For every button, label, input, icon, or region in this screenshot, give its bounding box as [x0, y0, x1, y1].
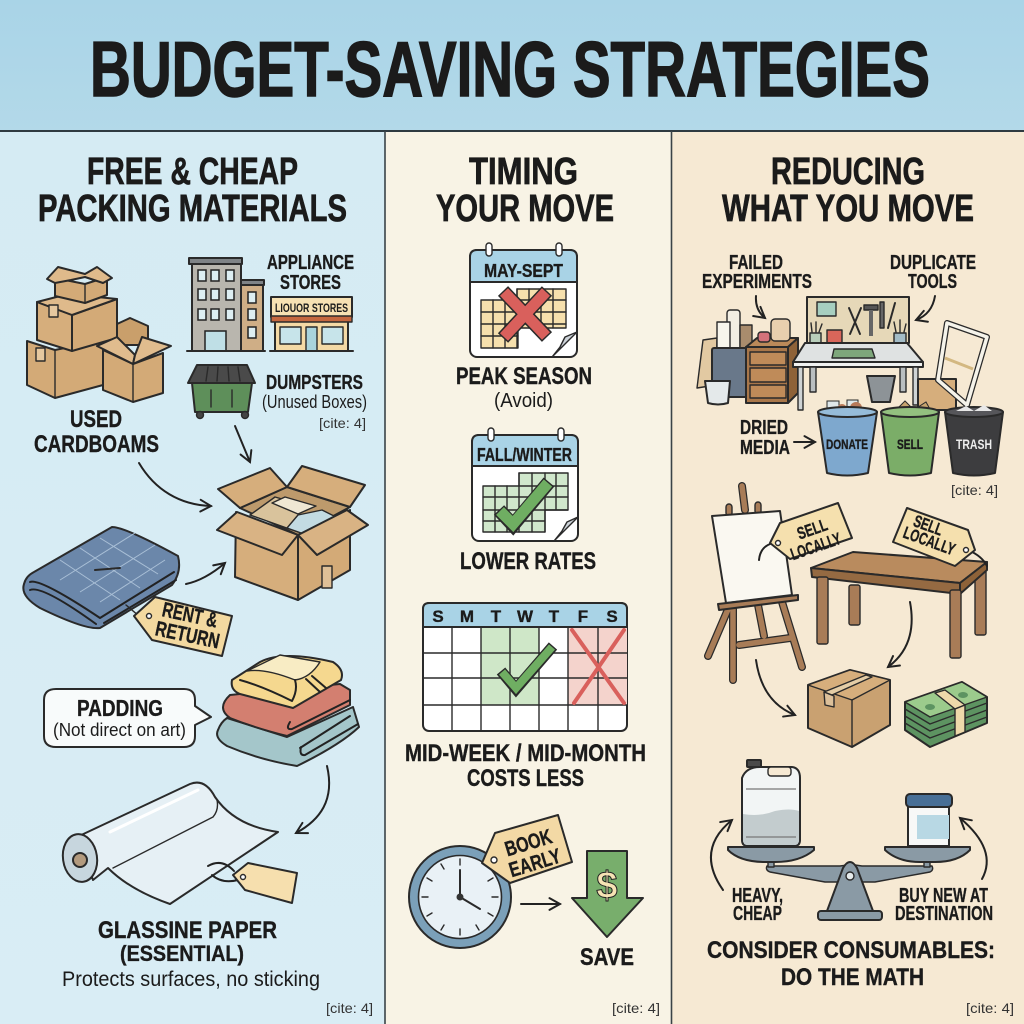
- label: dumpsters unused boxes: (Unused Boxes): [262, 392, 367, 412]
- heading: timing your move: YOUR MOVE: [436, 188, 614, 230]
- icon: balance scale with jug and jar: [728, 760, 970, 920]
- heading: timing your move: [436, 151, 614, 230]
- heading: timing your move: TIMING: [469, 151, 578, 193]
- label: consider consumables do the math: [707, 937, 995, 991]
- label: glassine paper essential: GLASSINE PAPER: [98, 917, 277, 944]
- label: mid-week mid-month costs less: [405, 740, 646, 792]
- citation: [cite: 4]: [951, 482, 998, 498]
- label: consider consumables do the math: DO THE MATH: [781, 964, 924, 991]
- label: appliance stores: [267, 252, 354, 294]
- callout: padding: PADDING: [77, 695, 163, 721]
- citation: [cite: 4]: [612, 1000, 660, 1016]
- arrow: dumpsters to box: [235, 426, 250, 462]
- label: duplicate tools: [890, 252, 976, 293]
- icon: stack of used cardboard boxes: [27, 267, 171, 402]
- panel: free and cheap packing materials: [0, 131, 385, 1024]
- label: used cardboards: CARDBOAMS: [34, 431, 159, 458]
- tag: sell locally easel: LOCALLY: [788, 529, 844, 564]
- tag: sell locally table: LOCALLY: [901, 523, 958, 560]
- icon: liquor store front: [270, 297, 353, 351]
- label: heavy cheap: HEAVY,: [732, 885, 783, 907]
- tag: rent and return: [126, 597, 232, 656]
- label: lower rates: LOWER RATES: [460, 548, 596, 575]
- label: mid-week mid-month costs less: MID-WEEK / MID-MONTH: [405, 740, 646, 767]
- arrow: tools to pegboard: [916, 296, 935, 320]
- label: dried media: DRIED: [740, 417, 788, 439]
- icon: taped box: [808, 670, 890, 747]
- icon: glassine paper roll: [60, 783, 297, 904]
- label: buy new at destination: [895, 885, 993, 925]
- citation: [cite: 4]: [966, 1000, 1014, 1016]
- label: failed experiments: [702, 252, 812, 293]
- icon: clock: [409, 846, 511, 948]
- arrow: easel to box: [756, 660, 795, 715]
- tag: book early: BOOK: [502, 825, 555, 861]
- label: used cardboards: [34, 406, 159, 458]
- arrow: jug: [711, 820, 732, 890]
- bin: donate: [818, 400, 877, 476]
- label: glassine paper essential: (ESSENTIAL): [120, 941, 244, 966]
- label: dried media: [740, 417, 790, 459]
- bin: trash: TRASH: [956, 436, 992, 452]
- bin: sell: SELL: [897, 436, 923, 452]
- heading: free and cheap packing materials: FREE & CHEAP: [87, 151, 298, 193]
- label: peak season avoid: (Avoid): [494, 390, 553, 412]
- label: glassine paper essential: Protects surfaces, no sticking: [62, 968, 320, 991]
- icon: save money arrow: $: [596, 865, 618, 907]
- callout: padding: [44, 689, 211, 747]
- label: glassine paper essential: [62, 917, 320, 991]
- icon: peak season calendar: [470, 243, 577, 357]
- icon: week calendar: T: [491, 607, 502, 626]
- label: appliance stores: APPLIANCE: [267, 252, 354, 274]
- label: heavy cheap: CHEAP: [733, 903, 782, 925]
- header band with title: [0, 0, 1024, 131]
- icon: open moving box: [217, 466, 368, 600]
- label: used cardboards: USED: [70, 406, 122, 433]
- label: dried media: MEDIA: [740, 437, 790, 459]
- label: peak season avoid: [456, 363, 592, 412]
- label: peak season avoid: PEAK SEASON: [456, 363, 592, 390]
- icon: week calendar: T: [549, 607, 560, 626]
- heading: reducing what you move: REDUCING: [771, 151, 925, 193]
- icon: save money arrow: [572, 851, 643, 937]
- label: mid-week mid-month costs less: COSTS LESS: [467, 765, 584, 792]
- icon: stack of cash: [905, 682, 987, 747]
- tag: sell locally table: SELL: [911, 511, 946, 540]
- icon: liquor store front: LIOUOR STORES: [275, 301, 348, 315]
- tag: rent and return: RETURN: [153, 617, 222, 653]
- label: save: SAVE: [580, 944, 634, 971]
- arrow: dried media to bin: [794, 441, 815, 443]
- arrow: clock to save: [521, 903, 560, 905]
- arrow: towels to paper: [296, 766, 329, 833]
- label: dumpsters unused boxes: DUMPSTERS: [266, 372, 363, 394]
- tag: sell locally easel: SELL: [795, 515, 830, 543]
- arrow: table to box: [888, 602, 912, 667]
- tag: sell locally easel: [759, 503, 852, 564]
- arrow: experiments to scene: [756, 296, 765, 318]
- icon: folded moving blanket: [23, 527, 179, 628]
- icon: week calendar: [423, 603, 627, 731]
- icon: peak season calendar: MAY-SEPT: [484, 261, 563, 281]
- tag: book early: [482, 815, 572, 883]
- icon: week calendar: S: [432, 607, 444, 626]
- heading: reducing what you move: [722, 151, 974, 230]
- label: dumpsters unused boxes: [262, 372, 367, 412]
- bin: donate: DONATE: [826, 436, 868, 452]
- heading: free and cheap packing materials: [38, 151, 347, 230]
- icon: week calendar: M: [460, 607, 474, 626]
- icon: stack of folded towels: [217, 655, 359, 766]
- citation: [cite: 4]: [319, 415, 366, 431]
- tag: rent and return: RENT &: [160, 598, 220, 633]
- label: duplicate tools: DUPLICATE: [890, 252, 976, 274]
- icon: green dumpster: [188, 365, 255, 418]
- arrow: jar: [960, 818, 987, 879]
- bin: trash: [945, 405, 1003, 476]
- panel: reducing what you move: [672, 131, 1024, 1024]
- label: duplicate tools: TOOLS: [908, 271, 957, 293]
- arrow: cardboards to box: [139, 463, 211, 506]
- heading: free and cheap packing materials: PACKING MATERIALS: [38, 188, 347, 230]
- icon: fall winter calendar: [472, 428, 578, 541]
- tag: sell locally table: [893, 508, 987, 566]
- panel dividers: [385, 131, 672, 1024]
- arrow: blanket to box: [186, 563, 225, 584]
- icon: easel with canvas: [708, 486, 802, 680]
- label: failed experiments: EXPERIMENTS: [702, 271, 812, 293]
- bin: sell: [881, 401, 939, 476]
- illustration: cluttered studio: [697, 297, 987, 410]
- callout: padding: (Not direct on art): [53, 720, 186, 740]
- icon: wooden table: [811, 552, 987, 658]
- icon: fall winter calendar: FALL/WINTER: [477, 445, 572, 465]
- icon: week calendar: W: [517, 607, 534, 626]
- label: failed experiments: FAILED: [729, 252, 783, 274]
- label: buy new at destination: BUY NEW AT: [899, 885, 988, 907]
- citation: [cite: 4]: [326, 1000, 373, 1016]
- icon: appliance store building: [187, 258, 265, 351]
- tag: book early: EARLY: [506, 845, 564, 882]
- panel: timing your move: [385, 131, 672, 1024]
- label: appliance stores: STORES: [280, 272, 341, 294]
- label: heavy cheap: [732, 885, 783, 925]
- icon: week calendar: F: [578, 607, 588, 626]
- icon: week calendar: S: [606, 607, 618, 626]
